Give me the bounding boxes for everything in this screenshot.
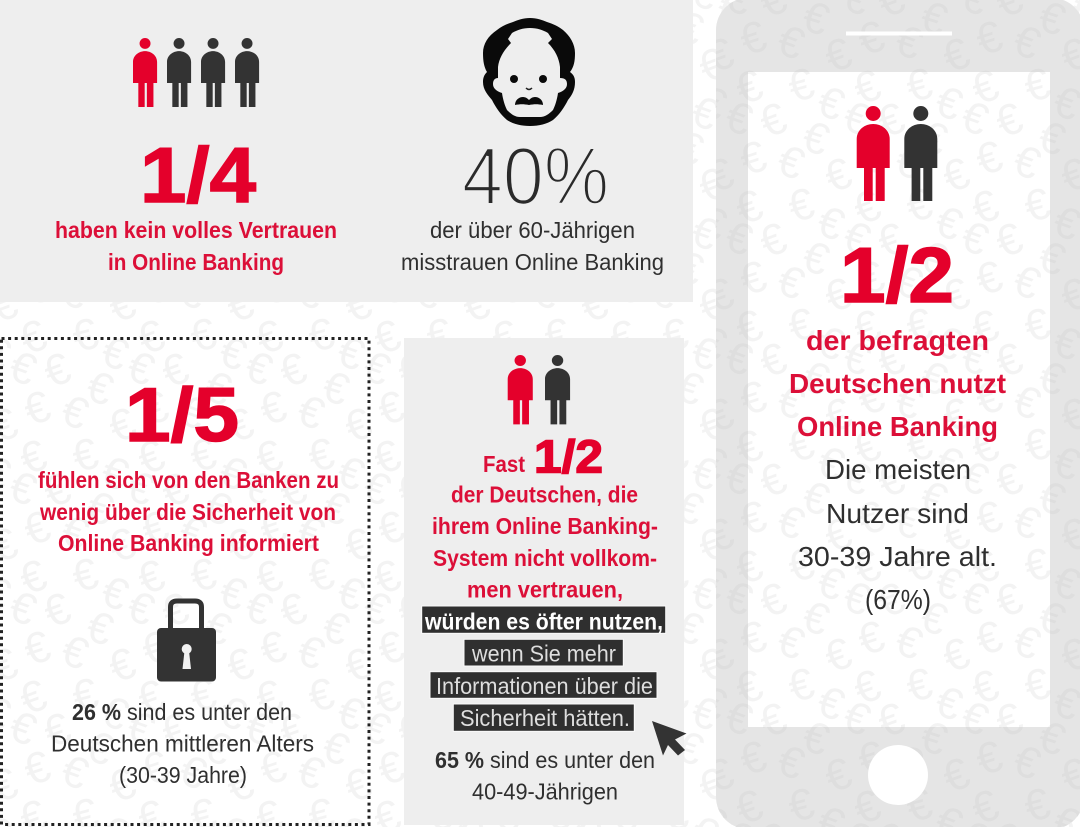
text: informed too little: wenig über die Sicherheit von [39, 499, 336, 525]
icon: four people, one highlighted [133, 38, 259, 107]
panel: smartphone [716, 0, 1080, 827]
highlighted text block: würden es öfter nutzen, [424, 608, 663, 634]
text: Germans not fully trusting: System nicht vollkom- [433, 545, 657, 571]
text: over sixties distrust: der über 60-Jährigen [430, 217, 635, 243]
stat: one half: 1/2 [840, 231, 954, 319]
text: middle-aged Germans: 26 % sind es unter den [72, 699, 292, 725]
text: middle-aged Germans: (30-39 Jahre) [119, 762, 247, 788]
phone speaker [846, 32, 952, 36]
stat: one quarter: 1/4 [140, 131, 256, 219]
panel: almost half [404, 338, 686, 825]
text: no full trust [55, 217, 337, 275]
text: over sixties distrust [401, 217, 664, 275]
text: 40 to 49 year olds: 65 % sind es unter den [435, 747, 655, 773]
text: no full trust: haben kein volles Vertrauen [55, 217, 337, 243]
text: user age: Nutzer sind [826, 498, 969, 529]
text: middle-aged Germans [51, 699, 314, 788]
stat: almost one half: Fast [483, 451, 525, 477]
icon: mouse cursor [652, 721, 686, 756]
phone screen [748, 72, 1050, 727]
text: 40 to 49 year olds: 40-49-Jährigen [472, 778, 618, 804]
text: half of Germans use online banking [789, 325, 1006, 442]
stat: 40 percent: 40% [462, 131, 609, 222]
highlighted text block: wenn Sie mehr [471, 641, 616, 667]
stat: almost one half [483, 430, 603, 482]
icon: old man face [483, 18, 575, 126]
text: user age [798, 454, 997, 615]
icon: padlock [157, 601, 216, 682]
highlighted text block [422, 606, 666, 731]
text: half of Germans use online banking: Deutschen nutzt [789, 368, 1006, 399]
phone body [716, 0, 1080, 827]
highlighted text block: Sicherheit hätten. [460, 705, 630, 731]
phone home button [868, 745, 928, 805]
panel: top statistics [0, 0, 693, 302]
stat: almost one half: 1/2 [534, 430, 603, 482]
text: informed too little [38, 467, 339, 556]
stat: one fifth: 1/5 [125, 373, 239, 458]
panel: one fifth, dotted frame [2, 338, 369, 824]
highlighted text block: Informationen über die [436, 673, 653, 699]
text: half of Germans use online banking: Online Banking [797, 411, 998, 442]
text: informed too little: fühlen sich von den Banken zu [38, 467, 339, 493]
text: middle-aged Germans: Deutschen mittleren Alters [51, 730, 314, 756]
text: over sixties distrust: misstrauen Online Banking [401, 249, 664, 275]
text: Germans not fully trusting: ihrem Online Banking- [432, 513, 658, 539]
text: user age: Die meisten [825, 454, 971, 485]
icon: two people [857, 106, 937, 201]
icon: two people [508, 355, 570, 424]
text: half of Germans use online banking: der befragten [806, 325, 989, 356]
text: informed too little: Online Banking informiert [58, 530, 319, 556]
text: user age: 30-39 Jahre alt. [798, 541, 997, 572]
text: no full trust: in Online Banking [108, 249, 284, 275]
text: Germans not fully trusting [432, 482, 658, 603]
text: user age: (67%) [865, 584, 931, 615]
text: 40 to 49 year olds [435, 747, 655, 804]
text: Germans not fully trusting: der Deutschen, die [451, 482, 638, 508]
text: Germans not fully trusting: men vertrauen, [467, 577, 623, 603]
